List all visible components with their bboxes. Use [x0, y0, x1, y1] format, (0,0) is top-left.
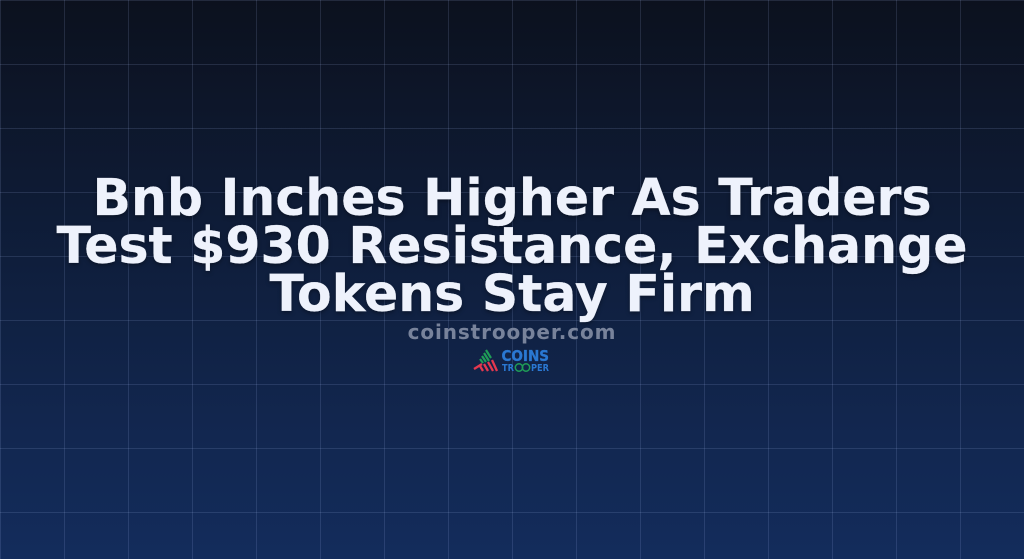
title: Tokens Stay Firm: [269, 264, 755, 322]
logo word: TROOPER start: TR: [502, 363, 515, 374]
title: Test $930 Resistance, Exchange: [56, 216, 967, 274]
icon: CoinsTrooper logo: [473, 347, 550, 374]
title: Bnb Inches Higher As Traders: [92, 168, 932, 226]
logo mark: green peaks: [480, 350, 491, 363]
logo word: TROOPER end: PER: [531, 363, 550, 374]
logo mark: red stripes: [474, 360, 497, 371]
logo: green double-O rings: [515, 364, 530, 371]
title: [56, 168, 967, 325]
site domain text: coinstrooper.com: [408, 320, 616, 344]
